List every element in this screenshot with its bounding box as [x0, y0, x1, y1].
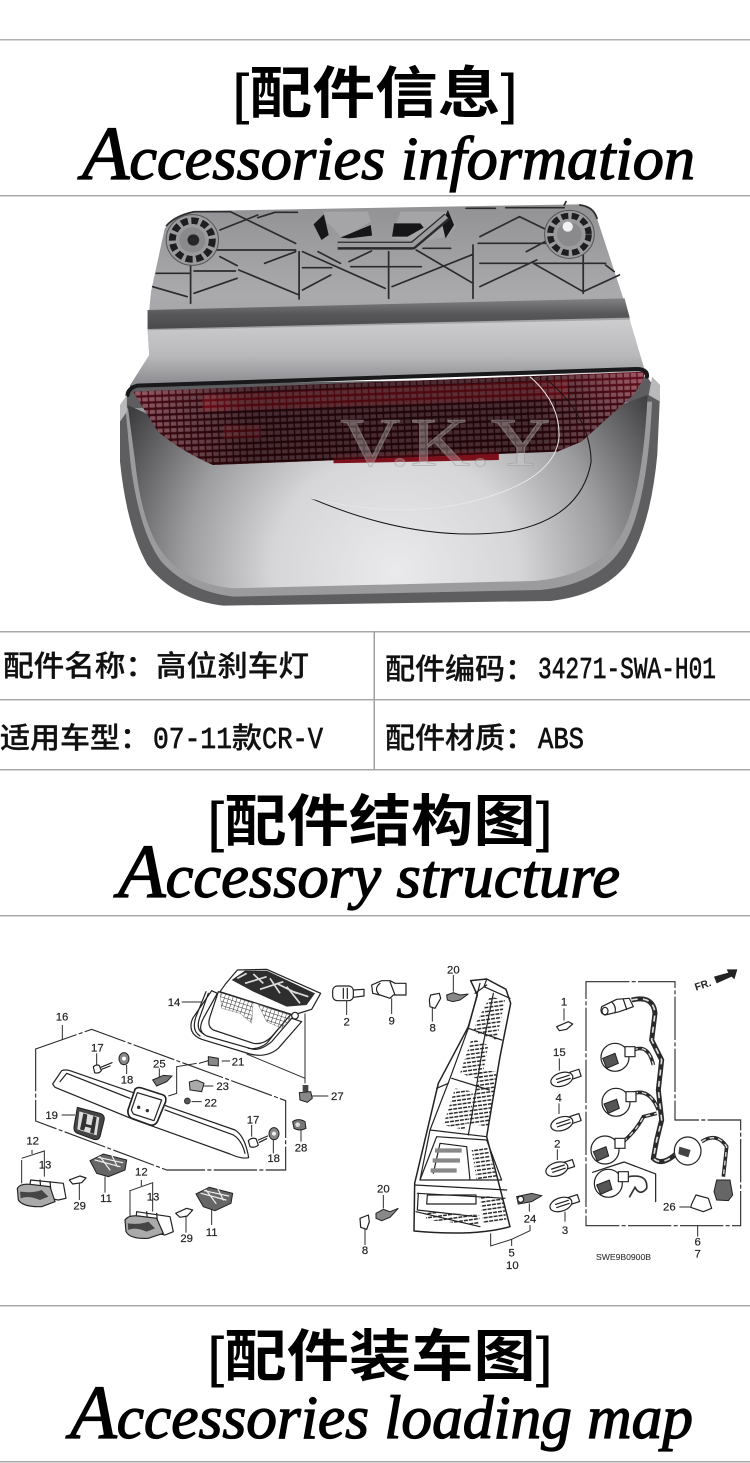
part numbers: 14 [168, 997, 180, 1009]
part numbers: 17 [91, 1042, 104, 1054]
panel: accessory structure heading [0, 777, 750, 916]
tail lamp assembly [414, 979, 511, 1233]
heading: English accessory structure: Accessory structure [113, 830, 620, 914]
code: diagram reference: SWE9B0900B [596, 1252, 651, 1262]
cell: part code: 配件编码： [385, 646, 535, 688]
part numbers [26, 997, 344, 1245]
part numbers: 2 [344, 1016, 350, 1028]
band: shadowed fold [148, 298, 630, 329]
cell: material: 配件材质： [385, 715, 535, 757]
part numbers: 21 [232, 1056, 244, 1068]
cell: applicable model [0, 715, 323, 758]
part numbers: 24 [524, 1214, 536, 1226]
part numbers: 1 [561, 997, 567, 1009]
part numbers: 13 [39, 1160, 51, 1172]
panel: accessories loading map heading [0, 1305, 750, 1462]
part numbers: 12 [26, 1136, 39, 1148]
part: garnish bar [53, 1070, 249, 1158]
cell: part name: 配件名称：高位刹车灯 [3, 643, 309, 685]
part numbers: 10 [506, 1260, 519, 1272]
part numbers: 25 [153, 1058, 166, 1070]
part 9: socket [372, 981, 406, 1014]
part numbers: 15 [553, 1047, 566, 1059]
part numbers: 7 [695, 1248, 701, 1260]
leaders and fasteners [22, 1002, 328, 1233]
panel: specification table [0, 631, 750, 770]
part numbers: 8 [362, 1245, 368, 1257]
cell: applicable model: 款 [232, 715, 262, 757]
part numbers: 2 [554, 1138, 560, 1150]
part numbers: 6 [695, 1237, 701, 1249]
tray: interior [128, 395, 648, 588]
part numbers: 23 [216, 1081, 229, 1093]
tray: outer bezel [120, 377, 660, 606]
part numbers: 8 [430, 1023, 436, 1035]
part 19: emblem [74, 1107, 104, 1140]
boss: left screw mount [166, 215, 218, 265]
part numbers: 18 [267, 1153, 280, 1165]
line art: right parts [333, 975, 741, 1246]
part numbers: 4 [556, 1092, 562, 1104]
part numbers: 11 [100, 1193, 112, 1205]
part numbers: 16 [56, 1012, 68, 1024]
parts 29: clips [69, 1176, 193, 1217]
diagram: exploded parts, left half [17, 969, 344, 1245]
boss: right screw mount [545, 210, 594, 258]
part numbers: 9 [389, 1016, 395, 1028]
part numbers [344, 964, 701, 1272]
part numbers: 13 [147, 1192, 159, 1204]
heading: Chinese accessory structure: [配件结构图 ] [207, 777, 553, 858]
arrow: front direction: FR. [694, 978, 713, 994]
parts 20 and 8: upper fasteners [429, 975, 468, 1022]
part numbers: 12 [135, 1166, 148, 1178]
part numbers: 29 [180, 1233, 193, 1245]
part numbers: 11 [206, 1227, 218, 1239]
cell: part code [385, 646, 716, 688]
parts 12 and 13: bulb sockets [17, 1180, 173, 1238]
part numbers: 5 [509, 1248, 515, 1260]
parts 20 and 8: lower fasteners [360, 1195, 398, 1245]
part numbers: 3 [562, 1225, 568, 1237]
heading: Chinese accessories information: [配件信息 ] [232, 49, 518, 130]
line art: left parts [17, 969, 328, 1238]
parts 11: brackets [90, 1154, 233, 1211]
band: light sloped face [130, 320, 645, 385]
watermark: swoosh curves [311, 377, 591, 534]
part numbers: 18 [121, 1074, 133, 1086]
cell: applicable model: CR-V [262, 723, 323, 758]
heading: Chinese loading map: [配件装车图 ] [207, 1312, 553, 1393]
part numbers: 26 [663, 1202, 676, 1214]
ribs: plate reinforcement lines [153, 202, 619, 303]
part 14: high-mount lamp [191, 969, 321, 1055]
cell: applicable model: 适用车型： [0, 715, 150, 757]
lens: red lamp cover [128, 369, 647, 465]
watermark: V.K.Y: V.K.Y [340, 406, 550, 481]
part numbers: 22 [204, 1098, 217, 1110]
part 2: bulb [333, 986, 364, 1015]
part numbers: 20 [447, 964, 460, 976]
dashed box 16: garnish assembly [36, 1029, 286, 1170]
heading: English loading map: Accessories loading map [65, 1371, 693, 1455]
part numbers: 20 [377, 1183, 390, 1195]
tray: inner rim [126, 402, 652, 597]
part: wiring harness [591, 998, 733, 1237]
heading: English accessories information: Accessories information [77, 112, 695, 196]
part numbers: 28 [295, 1142, 307, 1154]
dashed box 6/7: harness [586, 982, 741, 1226]
part 24: fastener and 5/10 bracket [491, 1193, 542, 1246]
bulbs 1, 15, 4, 2, 3 [544, 1008, 582, 1222]
part numbers: 27 [331, 1091, 344, 1103]
clip: centre latch [314, 210, 456, 246]
diagram: exploded parts, right half [333, 964, 741, 1272]
panel: accessories information heading [0, 39, 750, 196]
cell: applicable model: 07-11 [153, 723, 232, 758]
part numbers: 17 [247, 1114, 259, 1126]
part numbers: 29 [73, 1200, 86, 1212]
photo: high-mount brake light [120, 202, 660, 606]
plate: ribbed mounting plate [130, 204, 645, 385]
part numbers: 19 [45, 1110, 58, 1122]
cell: material: ABS [538, 723, 584, 758]
arrow: front direction [694, 969, 737, 994]
tabs: side lugs [120, 377, 660, 422]
